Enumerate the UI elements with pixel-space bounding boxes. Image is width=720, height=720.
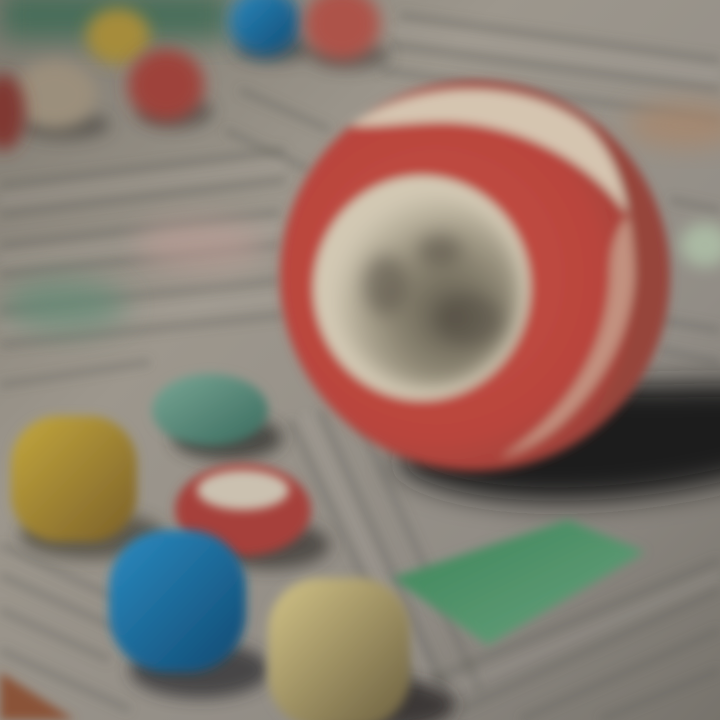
piece: blue top [229,0,301,56]
piece: teal die [152,374,283,460]
ball: large red and cream [280,81,670,471]
ball: right dark red edge [585,125,664,428]
ball: cream stripe top [350,90,628,215]
ball: dark speckles [363,234,504,346]
piece: yellow top [86,8,150,64]
card: green [392,520,645,645]
piece: red left edge [0,74,25,150]
piece: white left [13,61,97,129]
piece: cream die [268,578,455,720]
piece: yellow die [11,416,164,559]
piece: red and white chip [175,464,330,569]
corner: wooden table [0,672,75,720]
ball: textured centre [336,197,520,387]
piece: blue die [109,530,270,698]
piece: red and white [128,49,204,121]
piece: red top [304,0,380,60]
shadows: top pieces [20,34,390,139]
top game pieces [0,0,390,150]
ball: cream centre [314,176,530,400]
shadow: under large ball [392,380,720,501]
ball: cream stripe right [500,215,635,458]
